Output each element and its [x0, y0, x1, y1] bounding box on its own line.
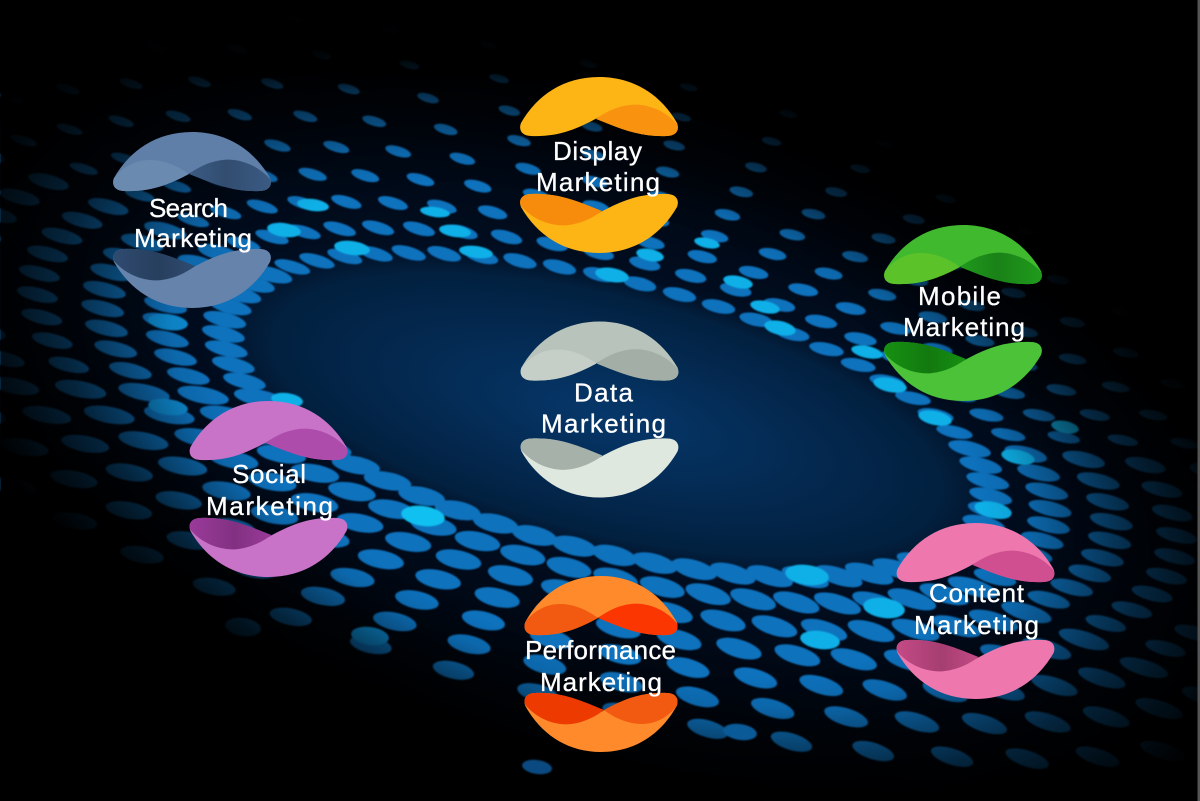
badge: Social Marketing: Social	[232, 459, 306, 489]
badge: Content Marketing: Content	[929, 578, 1025, 608]
right edge line	[1198, 0, 1200, 801]
badge: Social Marketing	[190, 401, 347, 577]
badge: Performance Marketing	[524, 576, 678, 752]
badge: Mobile Marketing: Mobile	[918, 281, 1001, 311]
badge: Data Marketing: Marketing	[541, 408, 666, 438]
badge: Search Marketing: Search	[149, 193, 228, 223]
badge: Mobile Marketing	[884, 225, 1042, 401]
badge: Content Marketing	[897, 523, 1054, 699]
badge: Search Marketing	[113, 132, 271, 308]
badge: Data Marketing: Data	[574, 378, 634, 408]
badge: Performance Marketing: Marketing	[540, 667, 662, 697]
badge: Mobile Marketing: Marketing	[903, 312, 1025, 342]
badge: Display Marketing: Marketing	[536, 167, 660, 197]
badge: Data Marketing	[521, 322, 678, 498]
badge: Content Marketing: Marketing	[914, 610, 1039, 640]
badge: Social Marketing: Marketing	[206, 491, 333, 521]
badge: Display Marketing	[520, 77, 678, 253]
badge: Performance Marketing: Performance	[525, 635, 676, 665]
badge: Search Marketing: Marketing	[134, 223, 252, 253]
badge: Display Marketing: Display	[553, 136, 642, 166]
